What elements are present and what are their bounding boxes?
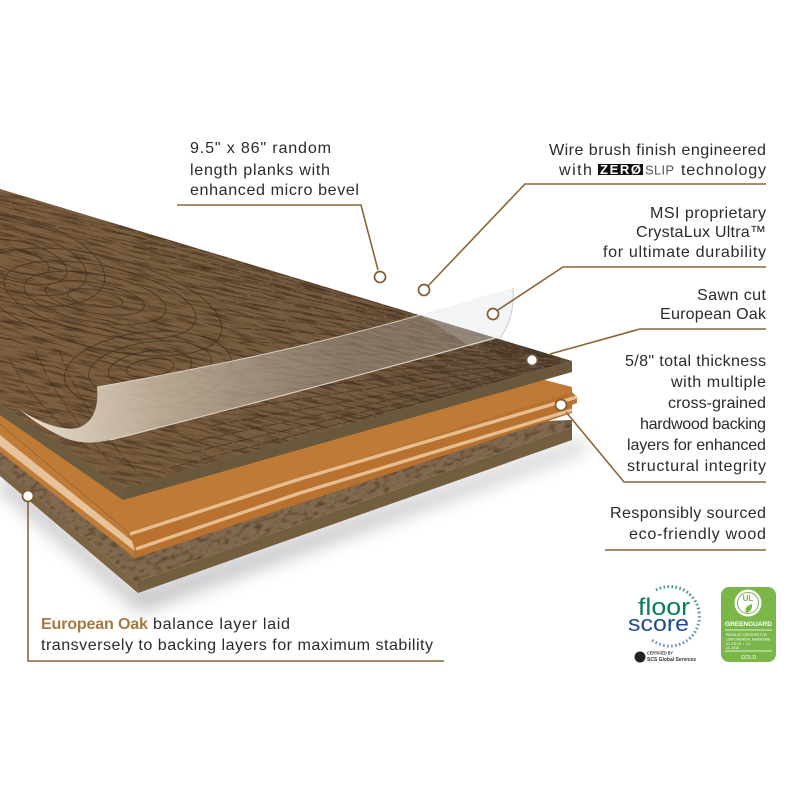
callout: CrystaLux: [488, 204, 767, 320]
logo: FloorScore: [628, 587, 699, 663]
CrystaLux text: [603, 204, 767, 261]
logo: FloorScore: score: [628, 611, 689, 636]
thickness text: 5/8" total thickness: [625, 352, 766, 370]
plank size text: 9.5" x 86" random: [190, 139, 331, 157]
ZeroSlip logo: SLIP: [645, 162, 674, 178]
cross-grained backing layers: [0, 380, 577, 558]
balance layer text: European Oak: [41, 615, 148, 633]
logo: FloorScore: CERTIFIED BY: [647, 650, 673, 656]
sawn cut text: Sawn cut: [697, 286, 767, 304]
callout: eco-friendly wood: eco-friendly wood: [629, 525, 766, 543]
CrystaLux text: CrystaLux Ultra™: [636, 223, 766, 241]
thickness text: layers for enhanced: [627, 436, 766, 454]
logo: Greenguard Gold: PRODUCT CERTIFIED FOR: [726, 633, 768, 637]
logo: Greenguard Gold: GOLD: [741, 655, 756, 661]
callout: sawn cut oak: [526, 286, 767, 366]
top oak wear layer: [0, 189, 572, 500]
oak grain: [0, 189, 566, 488]
plank size text: length planks with: [190, 161, 330, 179]
logo: Greenguard Gold: UL2818 / UL: [726, 642, 751, 646]
thickness text: [625, 352, 767, 475]
logo: Greenguard Gold: GREENGUARD: [725, 621, 772, 628]
wire brush text: with: [558, 161, 592, 179]
callout: wire brush finish: [418, 141, 767, 296]
balance layer text: transversely to backing layers for maximum stability: [41, 636, 434, 654]
callout: thickness: [556, 352, 767, 482]
balance layer text: balance layer laid: [153, 615, 290, 633]
sawn cut text: European Oak: [660, 305, 767, 323]
CrystaLux text: for ultimate durability: [603, 243, 767, 261]
thickness text: hardwood backing: [640, 415, 766, 433]
logo: Greenguard Gold: [721, 587, 776, 662]
plank illustration: [0, 189, 578, 593]
logo: FloorScore: SCS Global Services: [647, 657, 696, 663]
thickness text: structural integrity: [627, 457, 767, 475]
callout: plank size: [177, 139, 386, 282]
callout: eco-friendly wood: Responsibly sourced: [610, 504, 766, 522]
ZeroSlip logo: [598, 162, 674, 178]
thickness text: with multiple: [670, 373, 766, 391]
wire brush text: Wire brush finish engineered: [549, 141, 766, 159]
plank size text: enhanced micro bevel: [190, 181, 359, 199]
peeling CrystaLux film: [20, 288, 513, 443]
ZeroSlip logo: ZERØ: [600, 162, 641, 177]
plank size text: [190, 139, 359, 199]
wire brush text: technology: [681, 161, 767, 179]
logo: Greenguard Gold: UL 2818: [726, 646, 739, 650]
logo: Greenguard Gold: LOW CHEMICAL EMISSIONS: [726, 638, 771, 642]
logo: Greenguard Gold: UL: [743, 594, 753, 603]
logo: FloorScore: floor: [638, 594, 690, 621]
callout: balance layer: [22, 490, 444, 661]
balance layer text: [41, 615, 434, 654]
wire brush text: [549, 141, 767, 179]
drop shadow under planks: [0, 440, 585, 612]
balance layer plank: [0, 420, 572, 593]
CrystaLux text: MSI proprietary: [650, 204, 767, 222]
thickness text: cross-grained: [668, 394, 766, 412]
callout: eco-friendly wood: [605, 504, 766, 550]
sawn cut text: [660, 286, 767, 323]
